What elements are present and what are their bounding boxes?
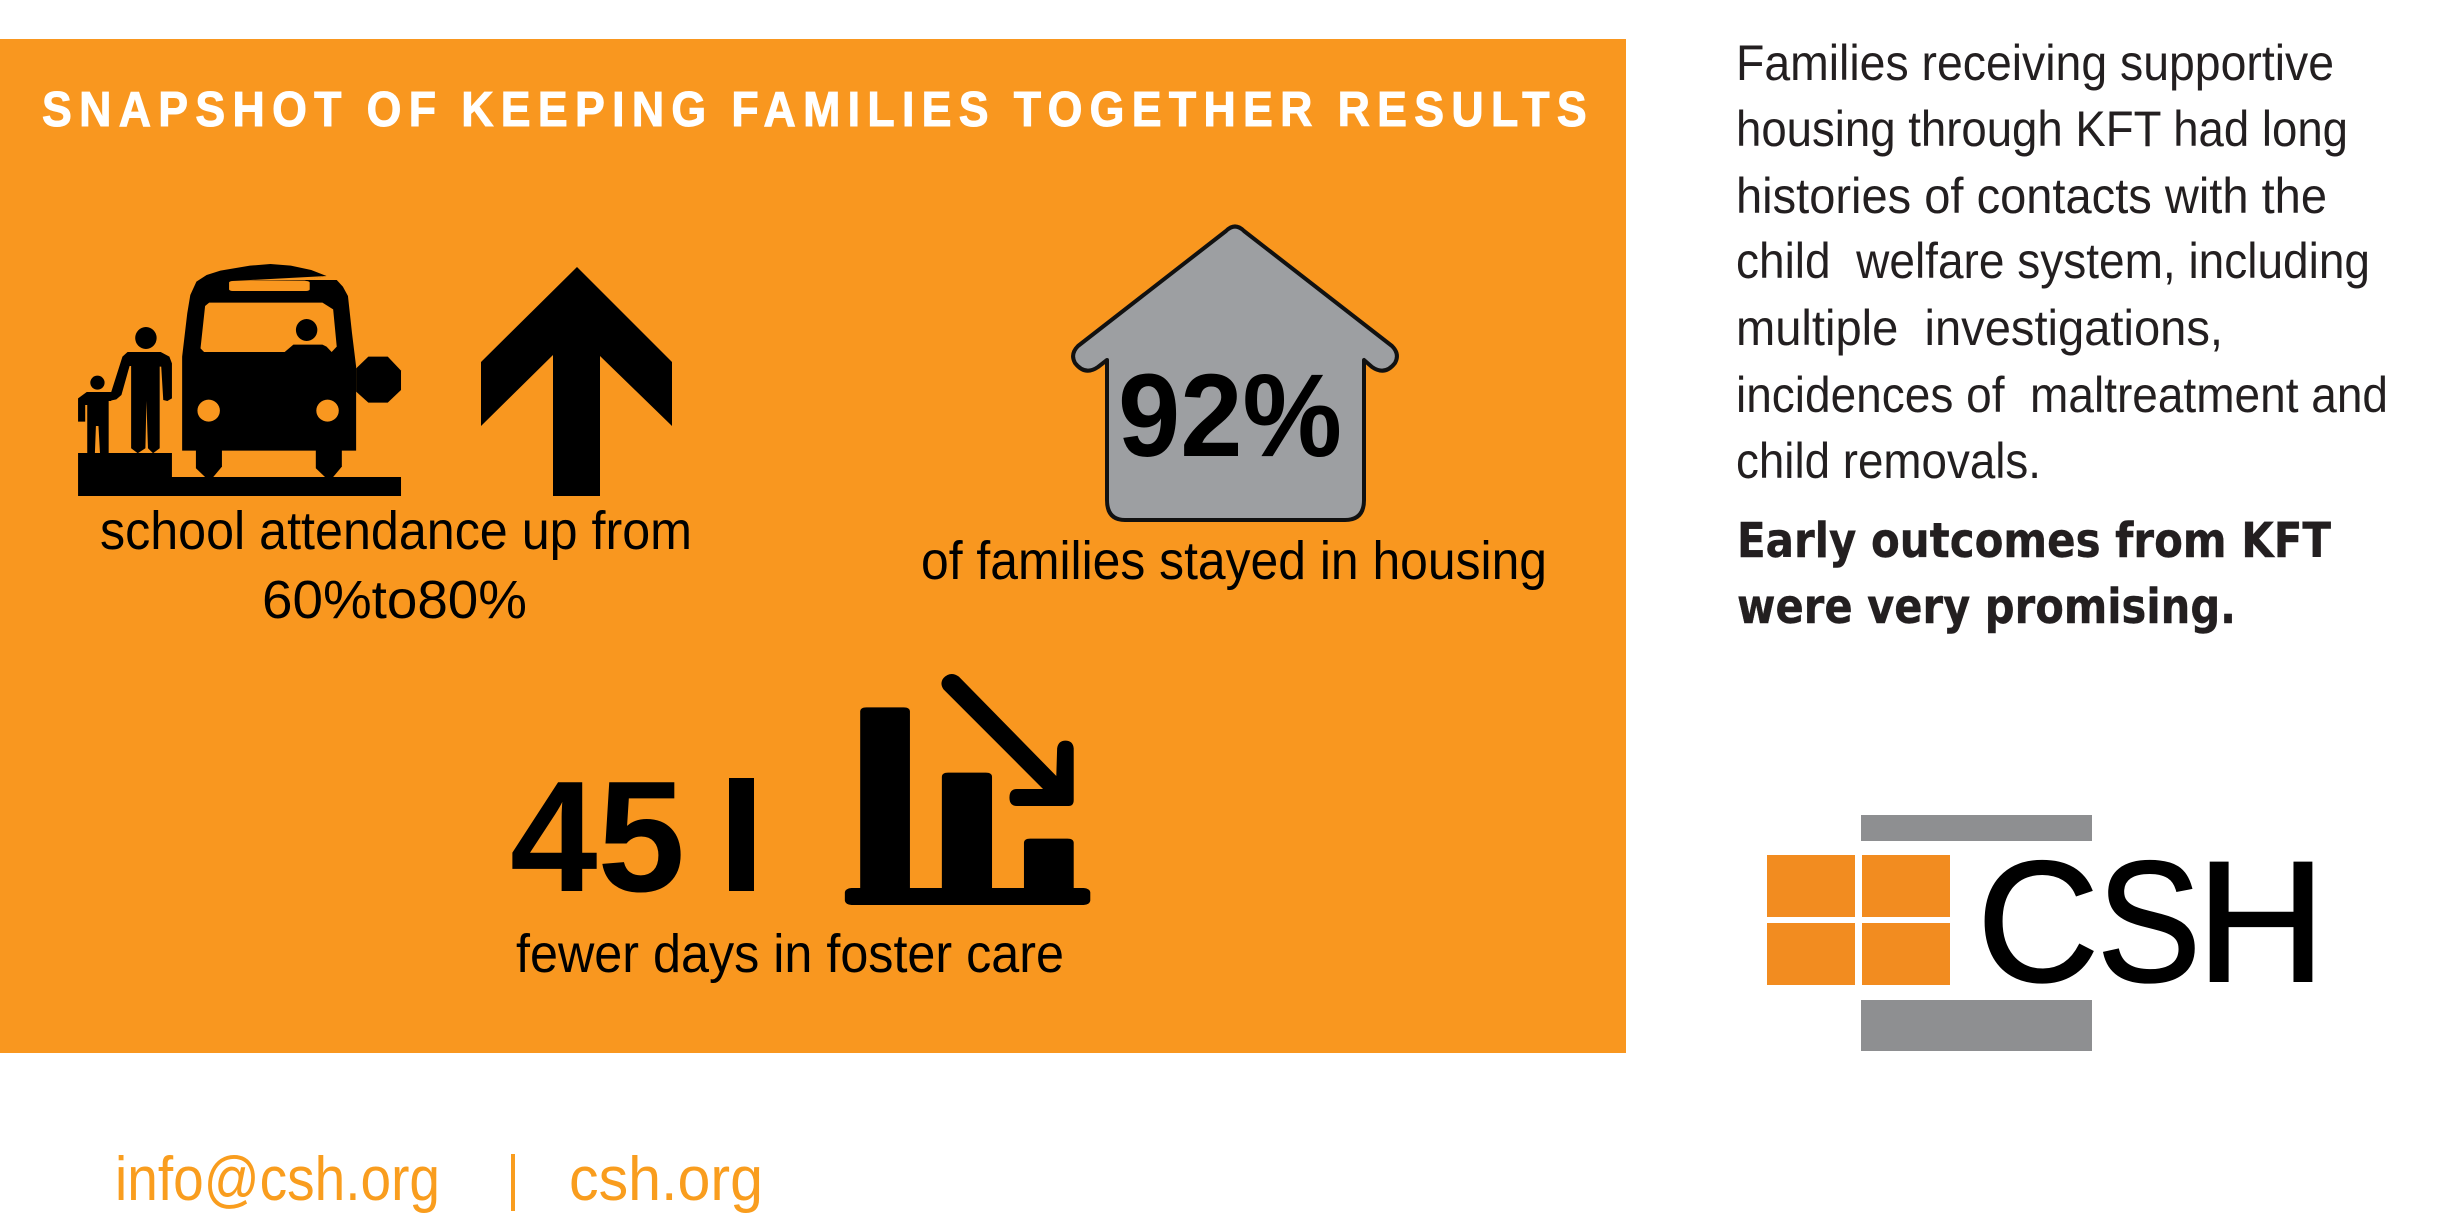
text block: intro paragraph (1736, 35, 2388, 489)
text block: intro paragraph: child welfare system, including (1736, 233, 2370, 289)
stat: 451: 1 (690, 749, 778, 925)
logo: CSH: H (2196, 826, 2326, 1018)
text block: bold conclusion (1737, 513, 2331, 635)
panel: orange results panel (0, 39, 1626, 1053)
text block: intro paragraph: child removals. (1736, 433, 2041, 489)
text block: intro paragraph: histories of contacts with the (1736, 168, 2327, 224)
footer: contact links: info@csh.org (115, 1145, 440, 1214)
stat: 451: 45 (510, 749, 685, 925)
text: school attendance label: 60%to80% (262, 570, 527, 630)
stat: 451 (512, 778, 754, 892)
logo: CSH: C (1977, 826, 2099, 1018)
text block: intro paragraph: multiple investigations, (1736, 300, 2223, 356)
footer: contact links (115, 1145, 763, 1214)
text block: bold conclusion: Early outcomes from KFT (1737, 513, 2331, 569)
text: stayed in housing label: of families stayed in housing (921, 531, 1547, 591)
logo: CSH: S (2097, 826, 2201, 1018)
text block: bold conclusion: were very promising. (1737, 579, 2236, 635)
text block: intro paragraph: housing through KFT had long (1736, 101, 2348, 157)
text block: intro paragraph: incidences of maltreatment and (1736, 367, 2388, 423)
icon: grey house with 92% (1073, 226, 1397, 520)
icon: school bus with adult and child (78, 264, 401, 496)
icon: declining bar chart with arrow (845, 674, 1090, 905)
text: school attendance label (100, 501, 692, 630)
title: SNAPSHOT OF KEEPING FAMILIES TOGETHER RESULTS (42, 83, 1594, 137)
logo: CSH (1767, 815, 2326, 1051)
icon: grey house with 92%: 92% (1118, 350, 1342, 482)
text block: intro paragraph: Families receiving supportive (1736, 35, 2334, 91)
icon: up arrow (481, 267, 672, 496)
text: school attendance label: school attendance up from (100, 501, 692, 561)
footer: contact links: csh.org (569, 1145, 763, 1214)
text: fewer days label: fewer days in foster care (516, 924, 1064, 984)
